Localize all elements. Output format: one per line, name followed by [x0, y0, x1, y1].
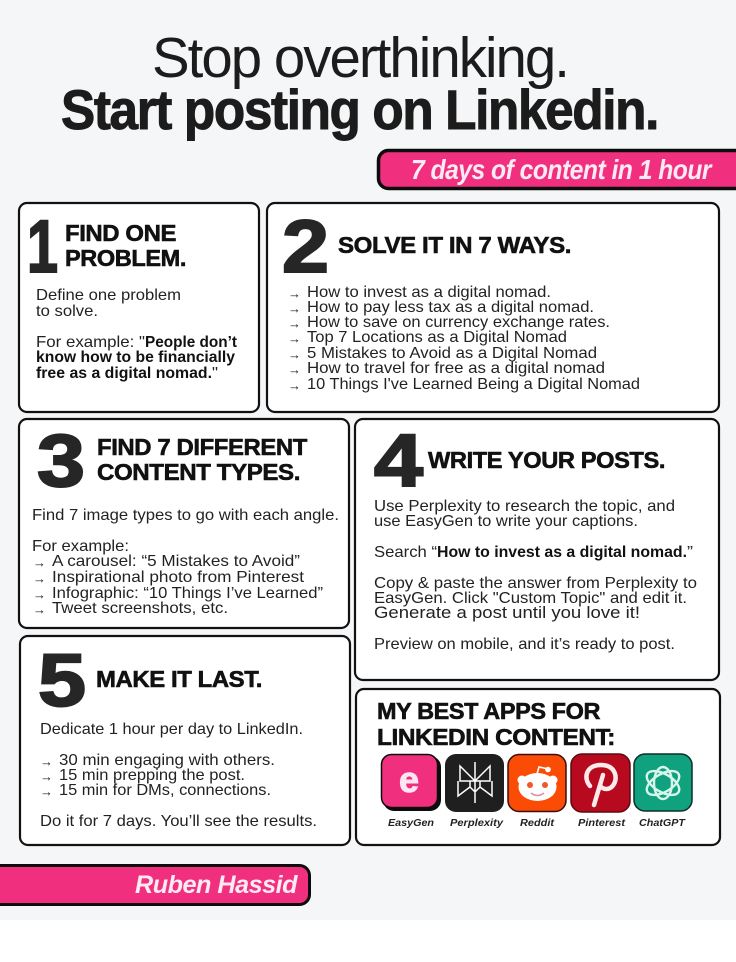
- list: seven angles: →: [288, 378, 301, 393]
- panel: step 4 write your posts: [355, 419, 719, 680]
- labels: app names: [388, 817, 687, 829]
- text: step 4 body: ”: [687, 544, 693, 561]
- list: seven angles: →: [288, 362, 301, 377]
- text: step 5 body: 15 min prepping the post.: [59, 767, 245, 784]
- icon: Pinterest: [571, 754, 630, 812]
- heading: my best apps: [377, 698, 615, 750]
- text: step 1 body: know how to be financially: [36, 349, 235, 366]
- text: step 1 body: to solve.: [36, 303, 98, 320]
- heading: find one problem: [65, 220, 186, 271]
- labels: app names: ChatGPT: [639, 817, 687, 829]
- heading: find 7 different content types: [97, 434, 308, 485]
- number 4: 4: [374, 419, 423, 502]
- text: step 3 body: Tweet screenshots, etc.: [52, 600, 228, 617]
- text: step 5 body: →: [40, 784, 53, 799]
- text: step 3 body: Infographic: “10 Things I’ve Learned”: [52, 585, 323, 602]
- text: step 3 body: Inspirational photo from Pinterest: [52, 569, 305, 586]
- text: step 5 body: 30 min engaging with others.: [59, 752, 275, 769]
- heading: find 7 different content types: FIND 7 DIFFERENT: [97, 434, 308, 460]
- footer banner: Ruben Hassid: [0, 866, 310, 904]
- list: seven angles: →: [288, 301, 301, 316]
- text: step 1 body: People don’t: [145, 334, 238, 351]
- text: step 5 body: →: [40, 754, 53, 769]
- list: seven angles: How to pay less tax as a digital nomad.: [307, 299, 594, 316]
- title: Stop overthinking.: [152, 26, 568, 90]
- labels: app names: Reddit: [520, 817, 555, 829]
- list: seven angles: 5 Mistakes to Avoid as a Digital Nomad: [307, 345, 597, 362]
- heading: my best apps: LINKEDIN CONTENT:: [377, 724, 615, 750]
- text: step 4 body: Preview on mobile, and it’s ready to post.: [374, 636, 675, 653]
- list: seven angles: →: [288, 347, 301, 362]
- text: step 4 body: How to invest as a digital nomad.: [437, 544, 687, 561]
- text: step 3 body: →: [33, 571, 46, 586]
- text: step 4 body: [374, 498, 697, 653]
- title: [61, 26, 658, 141]
- text: step 3 body: →: [33, 587, 46, 602]
- heading: find 7 different content types: CONTENT TYPES.: [97, 459, 300, 485]
- number 3: 3: [37, 419, 85, 502]
- list: seven angles: →: [288, 316, 301, 331]
- panel: step 1 find one problem: [19, 203, 259, 412]
- text: step 1 body: For example: ": [36, 334, 145, 351]
- panel: step 2 solve it in 7 ways: [267, 203, 719, 412]
- heading: solve it in 7 ways: SOLVE IT IN 7 WAYS.: [338, 232, 571, 258]
- text: step 1 body: free as a digital nomad.: [36, 365, 212, 382]
- text: step 5 body: 15 min for DMs, connections.: [59, 782, 271, 799]
- icon: Perplexity: [445, 754, 504, 812]
- title: Start posting on Linkedin.: [61, 78, 658, 141]
- icon: Reddit: [508, 754, 566, 812]
- list: seven angles: →: [288, 331, 301, 346]
- text: step 3 body: →: [33, 602, 46, 617]
- footer banner: Ruben Hassid: Ruben Hassid: [135, 871, 298, 899]
- icon: ChatGPT: [634, 754, 692, 811]
- panel: step 5 make it last: [20, 636, 350, 845]
- list: seven angles: How to invest as a digital nomad.: [307, 284, 551, 301]
- number 2: 2: [282, 205, 329, 288]
- panel: step 3 find 7 different content types: [19, 419, 349, 628]
- text: step 4 body: Generate a post until you love it!: [374, 604, 640, 622]
- text: step 4 body: use EasyGen to write your captions.: [374, 513, 638, 530]
- labels: app names: EasyGen: [388, 817, 434, 829]
- labels: app names: Perplexity: [450, 817, 504, 829]
- heading: my best apps: MY BEST APPS FOR: [377, 698, 600, 724]
- icon: EasyGen: e: [399, 759, 419, 800]
- number 5: 5: [38, 639, 86, 722]
- text: step 4 body: Search “: [374, 544, 437, 561]
- icon: EasyGen: [382, 754, 441, 811]
- heading: make it last: MAKE IT LAST.: [96, 666, 262, 692]
- panel: best apps: [356, 689, 720, 845]
- text: step 3 body: [32, 507, 339, 617]
- text: step 4 body: Copy & paste the answer from Perplexity to: [374, 575, 697, 592]
- heading: find one problem: FIND ONE: [65, 220, 176, 246]
- number 1: 1: [27, 205, 58, 288]
- text: step 3 body: Find 7 image types to go with each angle.: [32, 507, 339, 524]
- text: step 3 body: For example:: [32, 538, 129, 555]
- heading: find one problem: PROBLEM.: [65, 245, 186, 271]
- text: step 1 body: ": [212, 365, 218, 382]
- text: step 5 body: Dedicate 1 hour per day to LinkedIn.: [40, 721, 303, 738]
- list: seven angles: →: [288, 286, 301, 301]
- text: step 4 body: EasyGen. Click "Custom Topic" and edit it.: [374, 590, 687, 607]
- text: step 5 body: Do it for 7 days. You’ll see the results.: [40, 813, 317, 830]
- list: seven angles: How to travel for free as a digital nomad: [307, 360, 605, 377]
- text: step 1 body: Define one problem: [36, 287, 181, 304]
- list: seven angles: 10 Things I've Learned Being a Digital Nomad: [307, 376, 640, 393]
- list: seven angles: How to save on currency exchange rates.: [307, 314, 610, 331]
- list: seven angles: Top 7 Locations as a Digital Nomad: [307, 329, 567, 346]
- labels: app names: Pinterest: [578, 817, 626, 829]
- text: step 4 body: Use Perplexity to research the topic, and: [374, 498, 675, 515]
- text: step 3 body: →: [33, 555, 46, 570]
- text: step 3 body: A carousel: “5 Mistakes to Avoid”: [52, 553, 300, 570]
- text: step 5 body: [40, 721, 317, 830]
- list: seven angles: [288, 284, 640, 393]
- text: step 5 body: →: [40, 769, 53, 784]
- text: step 1 body: [36, 287, 238, 382]
- heading: write your posts: WRITE YOUR POSTS.: [428, 447, 665, 473]
